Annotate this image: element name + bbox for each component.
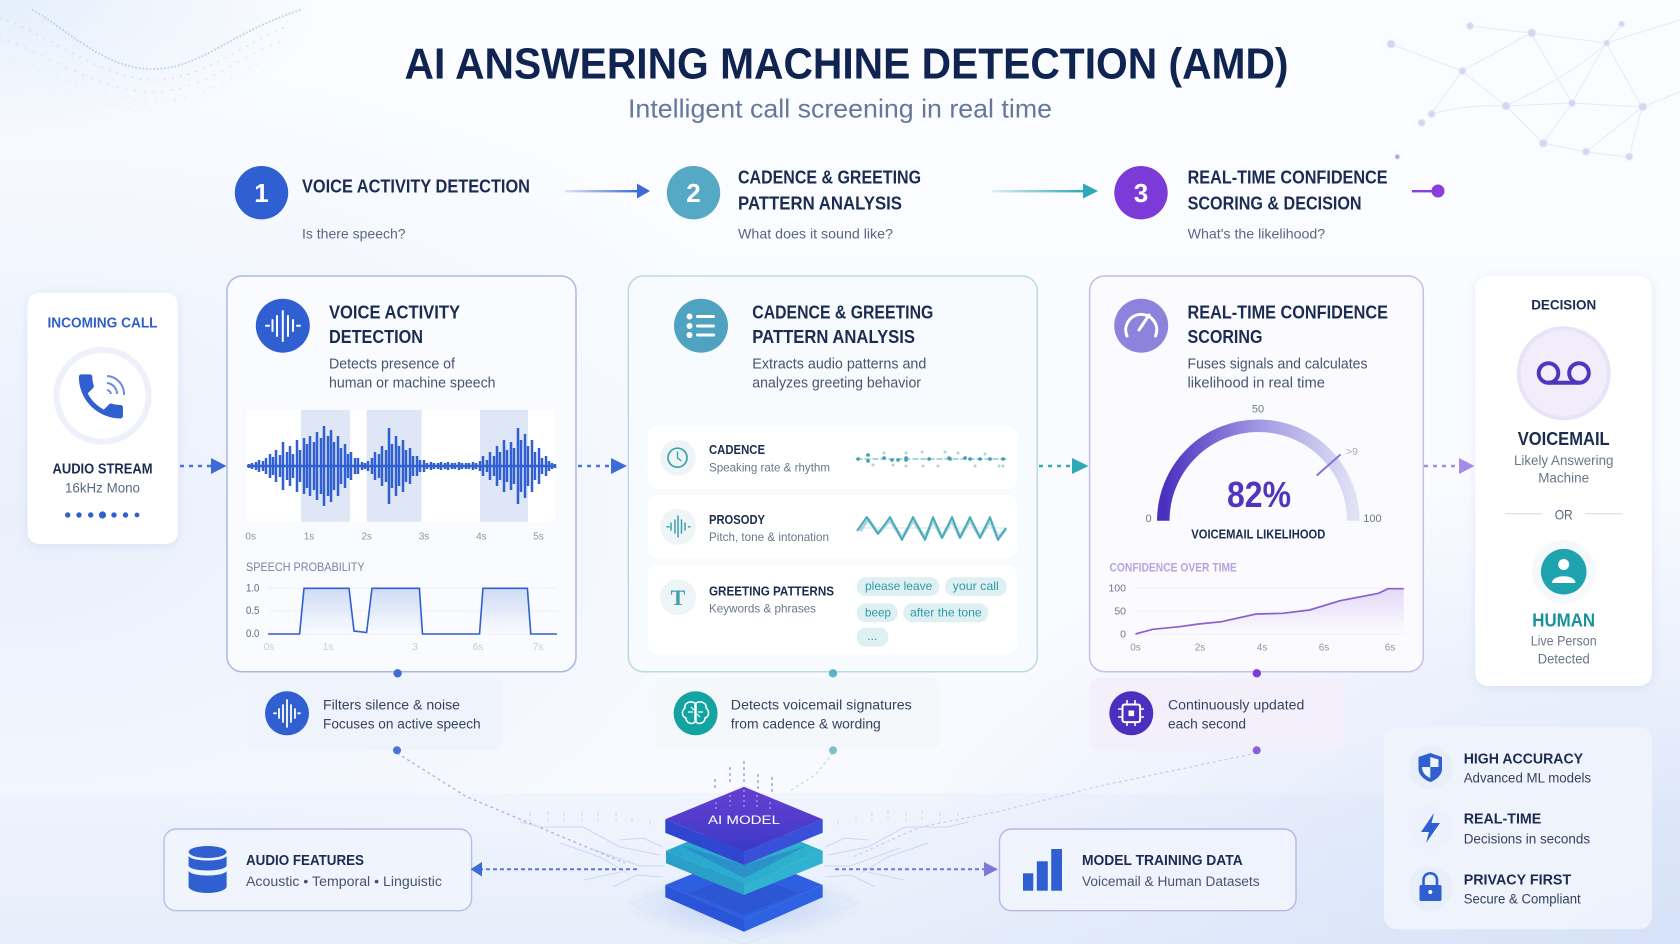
row: prosody xyxy=(648,495,1017,558)
heading xyxy=(329,302,460,347)
heading: SCORING xyxy=(1188,327,1262,347)
step 3 header: 3 xyxy=(1134,178,1148,208)
icon: voicemail xyxy=(1519,328,1609,418)
panel: decision: Detected xyxy=(1538,651,1590,666)
panel: benefits xyxy=(1384,727,1652,929)
row: greeting patterns: GREETING PATTERNS xyxy=(709,584,834,598)
panel: audio features: Acoustic • Temporal • Linguistic xyxy=(246,874,442,889)
confidence over time chart xyxy=(1108,560,1404,653)
AI model stack xyxy=(624,787,864,944)
panel: real-time confidence scoring xyxy=(1090,276,1423,672)
icon: phone xyxy=(56,350,148,442)
arrow: call to panel 1 xyxy=(180,458,226,474)
gauge chart: 50 xyxy=(1252,404,1264,416)
waveform chart xyxy=(245,410,556,542)
gauge chart xyxy=(1145,404,1382,542)
panel: audio features: AUDIO FEATURES xyxy=(246,853,364,869)
description xyxy=(329,356,496,391)
step 2 header: 2 xyxy=(686,178,701,208)
cadence rhythm graphic xyxy=(857,452,1006,466)
heading: VOICE ACTIVITY xyxy=(329,302,460,322)
description: likelihood in real time xyxy=(1188,375,1325,391)
step 2 header: What does it sound like? xyxy=(738,225,893,241)
arrow: model to training data xyxy=(835,862,998,876)
speech probability chart: 0.5 xyxy=(246,605,259,617)
callout: detects signatures: from cadence & wording xyxy=(731,716,881,731)
benefit: real-time: REAL-TIME xyxy=(1464,812,1542,828)
step 1 header: 1 xyxy=(254,178,269,208)
keyword chips: after the tone xyxy=(910,606,982,620)
description xyxy=(1188,356,1368,391)
arrow: step 1 to step 2 xyxy=(565,184,650,198)
callout: continuously updated xyxy=(1090,678,1344,751)
description: human or machine speech xyxy=(329,375,496,391)
step 2 header: PATTERN ANALYSIS xyxy=(738,193,902,213)
speech probability chart: 3 xyxy=(412,642,418,653)
row: prosody: PROSODY xyxy=(709,513,766,527)
confidence over time chart: CONFIDENCE OVER TIME xyxy=(1110,560,1237,574)
step 3 header: REAL-TIME CONFIDENCE xyxy=(1188,167,1388,187)
layer: top: AI MODEL xyxy=(708,813,780,827)
step 1 header: Is there speech? xyxy=(302,225,406,241)
arrow: model to audio features xyxy=(471,862,637,876)
step 3 header: SCORING & DECISION xyxy=(1188,193,1362,213)
decoration: dotted wave top left xyxy=(0,10,300,112)
waveform chart: 2s xyxy=(361,531,372,542)
panel: decision: HUMAN xyxy=(1532,611,1595,631)
gauge chart: >9 xyxy=(1346,446,1358,458)
keyword chips: beep xyxy=(865,606,891,620)
callout: detects signatures xyxy=(655,678,940,751)
waveform chart: 5s xyxy=(533,531,544,542)
callout: continuously updated: each second xyxy=(1168,716,1246,731)
icon: gauge xyxy=(1114,299,1168,353)
arrow: panel 3 to decision xyxy=(1424,458,1474,474)
confidence over time chart: 100 xyxy=(1108,583,1126,595)
confidence over time chart: 0s xyxy=(1130,642,1141,653)
panel: decision xyxy=(1475,276,1652,686)
decoration: neural network top right xyxy=(1387,20,1680,160)
waveform chart: 4s xyxy=(476,531,487,542)
benefit: high accuracy: HIGH ACCURACY xyxy=(1464,751,1583,767)
callout: filters silence: Filters silence & noise xyxy=(323,698,460,712)
description: Fuses signals and calculates xyxy=(1188,356,1368,372)
panel: decision: Live Person xyxy=(1531,634,1597,649)
heading xyxy=(1188,302,1388,347)
confidence over time chart: 4s xyxy=(1257,642,1267,653)
gauge chart: 82% xyxy=(1227,474,1291,515)
confidence over time chart: 2s xyxy=(1195,642,1205,653)
prosody pitch graphic xyxy=(857,517,1006,540)
connector dot: panel 1 xyxy=(393,669,402,678)
row: greeting patterns: Keywords & phrases xyxy=(709,601,816,615)
heading: REAL-TIME CONFIDENCE xyxy=(1188,302,1388,322)
layer: top xyxy=(665,787,823,865)
confidence over time chart: 50 xyxy=(1114,605,1126,617)
keyword chips: ... xyxy=(867,629,877,643)
speech probability chart: 1s xyxy=(323,642,333,653)
callout: filters silence xyxy=(247,678,503,751)
keyword chips xyxy=(857,577,1007,647)
row: cadence: Speaking rate & rhythm xyxy=(709,460,830,474)
benefit: real-time: Decisions in seconds xyxy=(1464,831,1590,846)
arrow: panel 1 to panel 2 xyxy=(578,458,627,474)
description: Extracts audio patterns and xyxy=(752,356,926,372)
arrow: panel 2 to panel 3 xyxy=(1039,458,1088,474)
benefit: real-time xyxy=(1408,806,1590,850)
keyword chips: please leave xyxy=(865,579,933,593)
benefit: high accuracy xyxy=(1408,745,1591,789)
panel: voice activity detection xyxy=(227,276,576,672)
panel: incoming call: 16kHz Mono xyxy=(65,480,140,495)
icon: sound wave xyxy=(256,299,310,353)
speech probability chart: 6s xyxy=(473,642,483,653)
panel: incoming call: AUDIO STREAM xyxy=(52,461,152,477)
panel: model training data: Voicemail & Human Datasets xyxy=(1082,874,1260,889)
confidence over time chart: 0 xyxy=(1120,628,1126,640)
waveform chart: 1s xyxy=(304,531,314,542)
speech probability chart: 0s xyxy=(264,642,274,653)
icon: list xyxy=(674,299,728,353)
heading: PATTERN ANALYSIS xyxy=(752,327,915,347)
panel: model training data: MODEL TRAINING DATA xyxy=(1082,853,1243,869)
panel: decision: Likely Answering xyxy=(1514,453,1613,468)
heading xyxy=(752,302,933,347)
step 1 header: VOICE ACTIVITY DETECTION xyxy=(302,176,530,196)
layer: base xyxy=(665,853,823,932)
connector dot: panel 3 xyxy=(1253,669,1261,678)
panel: model training data xyxy=(1000,829,1296,911)
description: Detects presence of xyxy=(329,356,456,372)
heading: DETECTION xyxy=(329,327,423,347)
panel: audio features xyxy=(164,829,472,911)
icon: bar chart xyxy=(1023,849,1062,891)
keyword chips: your call xyxy=(953,579,999,593)
description xyxy=(752,356,926,391)
arrow: step 2 to step 3 xyxy=(992,184,1098,198)
step 1 header xyxy=(235,166,530,241)
panel: decision: DECISION xyxy=(1531,297,1596,312)
panel: decision: Machine xyxy=(1538,471,1589,486)
speech probability chart: 0.0 xyxy=(246,628,259,640)
row: cadence xyxy=(648,426,1017,489)
connector dot: panel 2 xyxy=(829,669,837,678)
row: cadence: CADENCE xyxy=(709,443,765,457)
confidence over time chart: 6s xyxy=(1385,642,1395,653)
icon: human xyxy=(1532,540,1596,604)
callout: continuously updated: Continuously updated xyxy=(1168,698,1304,712)
subtitle: Intelligent call screening in real time xyxy=(628,93,1052,123)
row: prosody: Pitch, tone & intonation xyxy=(709,530,829,544)
arrow: step 3 terminal dot xyxy=(1412,184,1444,198)
speech probability chart: 1.0 xyxy=(246,582,259,594)
panel: incoming call xyxy=(28,293,178,544)
decoration: circuit traces xyxy=(520,762,968,887)
gauge chart: 0 xyxy=(1145,513,1152,525)
row: greeting patterns xyxy=(648,565,1017,654)
speech probability chart: 7s xyxy=(533,642,543,653)
row: greeting patterns: T xyxy=(671,585,686,610)
divider: or: OR xyxy=(1555,506,1573,522)
panel: incoming call: INCOMING CALL xyxy=(48,316,158,332)
waveform chart: 0s xyxy=(245,531,256,542)
callout: detects signatures: Detects voicemail signatures xyxy=(731,698,912,712)
benefit: privacy first: Secure & Compliant xyxy=(1464,892,1581,907)
speech probability chart: SPEECH PROBABILITY xyxy=(246,560,365,574)
description: analyzes greeting behavior xyxy=(752,375,921,391)
panel: decision: VOICEMAIL xyxy=(1518,429,1610,449)
callout: filters silence: Focuses on active speech xyxy=(323,716,481,731)
divider: or xyxy=(1505,506,1623,522)
waveform chart: 3s xyxy=(419,531,429,542)
step 2 header: CADENCE & GREETING xyxy=(738,167,921,187)
title: AI ANSWERING MACHINE DETECTION (AMD) xyxy=(404,40,1288,88)
step 2 header xyxy=(667,166,921,241)
panel: cadence and greeting analysis xyxy=(628,276,1037,672)
step 3 header: What's the likelihood? xyxy=(1188,225,1325,241)
icon: database xyxy=(189,846,227,893)
benefit: high accuracy: Advanced ML models xyxy=(1464,771,1591,786)
benefit: privacy first xyxy=(1408,866,1581,910)
gauge chart: VOICEMAIL LIKELIHOOD xyxy=(1191,528,1325,542)
confidence over time chart: 6s xyxy=(1319,642,1329,653)
icon: stream dots xyxy=(65,511,139,519)
connectors: callouts to AI model xyxy=(393,746,1261,863)
gauge chart: 100 xyxy=(1363,513,1382,525)
layer: middle xyxy=(666,818,823,895)
benefit: privacy first: PRIVACY FIRST xyxy=(1464,872,1571,888)
step 3 header xyxy=(1114,166,1388,241)
heading: CADENCE & GREETING xyxy=(752,302,933,322)
speech probability chart xyxy=(246,560,557,653)
